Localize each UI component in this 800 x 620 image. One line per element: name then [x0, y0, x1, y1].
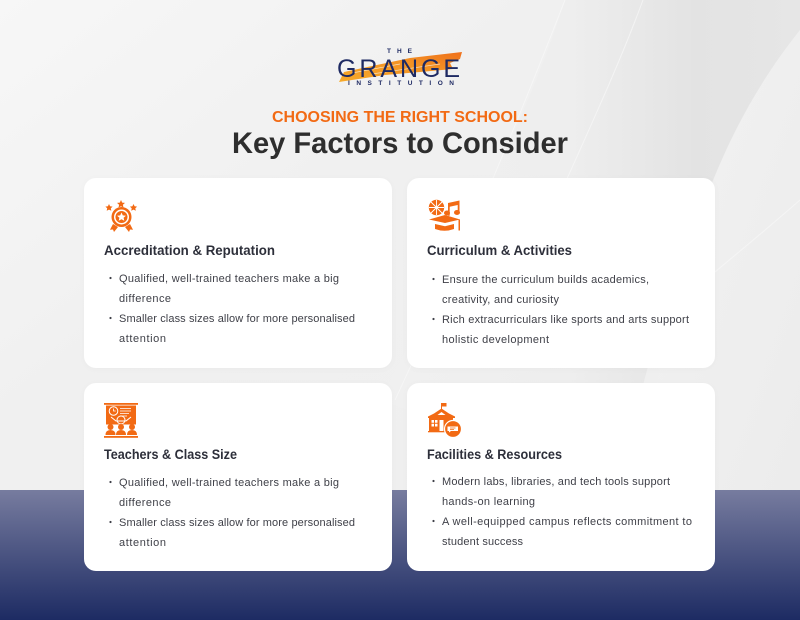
bullet list: Ensure the curriculum builds academics,: [442, 274, 649, 286]
logo wordmark: THE: [387, 48, 413, 55]
subtitle: CHOOSING THE RIGHT SCHOOL:: [272, 109, 528, 126]
navy gradient footer band: [0, 490, 800, 620]
bullet list: Rich extracurriculars like sports and arts support: [442, 314, 689, 326]
bullet list: [432, 274, 689, 346]
icon: teacher at board with students: [104, 403, 138, 438]
bullet list: [109, 477, 355, 549]
bullet list: difference: [119, 497, 171, 509]
panel: facilities and resources: [407, 383, 715, 571]
bullet list: Qualified, well-trained teachers make a big: [119, 273, 339, 285]
bullet list: holistic development: [442, 334, 549, 346]
heading: Facilities & Resources: [427, 447, 562, 462]
heading: Accreditation & Reputation: [104, 243, 275, 258]
title: [232, 109, 568, 160]
bullet list: [109, 273, 355, 345]
heading: Curriculum & Activities: [427, 243, 572, 258]
bullet list: Smaller class sizes allow for more personalised: [119, 313, 355, 325]
bullet list: creativity, and curiosity: [442, 294, 560, 306]
bullet list: Qualified, well-trained teachers make a big: [119, 477, 339, 489]
bullet list: Modern labs, libraries, and tech tools support: [442, 476, 670, 488]
bullet list: student success: [442, 536, 524, 548]
bullet list: Smaller class sizes allow for more personalised: [119, 517, 355, 529]
bullet list: attention: [119, 537, 166, 549]
bullet list: A well-equipped campus reflects commitment to: [442, 516, 692, 528]
icon: basketball, music note and graduation cap: [429, 200, 460, 231]
panel: accreditation and reputation: [84, 178, 392, 368]
icon: school building with chat badge: [428, 403, 462, 438]
bullet list: hands-on learning: [442, 496, 535, 508]
heading: Teachers & Class Size: [104, 447, 237, 462]
logo: GRANGE: [337, 55, 460, 83]
main heading: Key Factors to Consider: [232, 127, 568, 160]
panel: curriculum and activities: [407, 178, 715, 368]
bullet list: attention: [119, 333, 166, 345]
logo brush stroke: [339, 52, 462, 82]
logo: INSTITUTION: [348, 80, 454, 87]
icon: award rosette: [105, 200, 137, 232]
bullet list: difference: [119, 293, 171, 305]
panel: teachers and class size: [84, 383, 392, 571]
bullet list: [432, 476, 692, 548]
